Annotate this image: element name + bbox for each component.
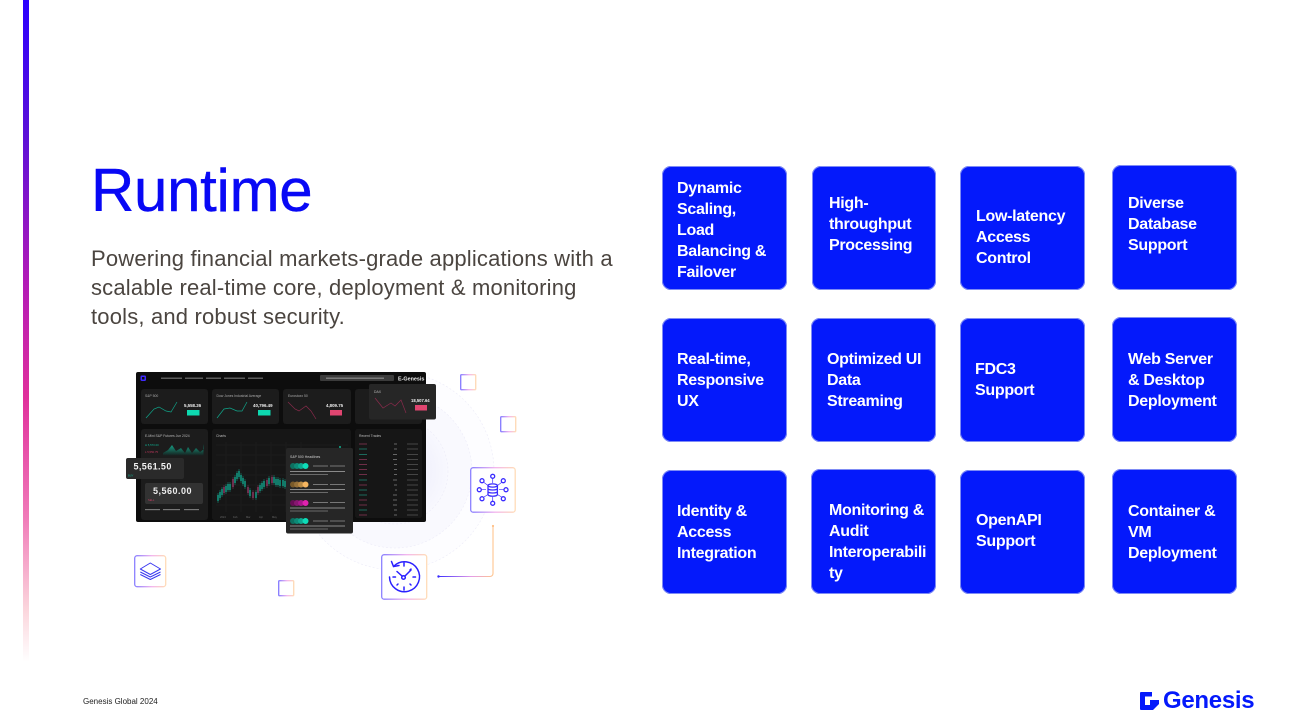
candles: falling xyxy=(224,475,272,500)
charts panel: Feb xyxy=(233,515,238,519)
feature card: Identity xyxy=(662,470,787,594)
recent trades panel xyxy=(355,429,422,518)
dashboard mockup xyxy=(126,372,436,534)
feature card: Container: Container & xyxy=(1128,503,1215,520)
price card: 5,561.50: 5,561.50 xyxy=(134,462,172,472)
feature card: FDC3: FDC3 xyxy=(975,361,1016,378)
feature card: Identity: Access xyxy=(677,524,731,541)
feature card: Diverse Database: Support xyxy=(1128,237,1187,254)
ticker card: Eurostoxx 50: 4,809.75 xyxy=(326,403,344,408)
feature card: Monitoring xyxy=(811,469,936,594)
headlines panel: S&P 500 Headlines xyxy=(290,455,321,459)
feature card: Low-latency xyxy=(960,166,1085,290)
feature card: Container xyxy=(1112,469,1237,594)
feature card: Web Server: & Desktop xyxy=(1128,372,1204,389)
feature card: Monitoring: Interoperabili xyxy=(829,544,926,561)
feature card: Container: VM xyxy=(1128,524,1151,541)
futures panel: H 5,570.00 xyxy=(145,443,159,447)
feature card: Web Server: Deployment xyxy=(1128,393,1217,410)
subtitle text: Powering financial markets-grade applications with a xyxy=(91,246,613,271)
charts panel: 2024 xyxy=(220,515,226,519)
feature card: FDC3: Support xyxy=(975,382,1034,399)
price card: 5,561.50: BUY xyxy=(128,474,134,478)
feature card: Monitoring: Audit xyxy=(829,523,868,540)
feature card: Real-time UX xyxy=(662,318,787,442)
DAX floating card xyxy=(369,384,436,420)
feature card: Monitoring: ty xyxy=(829,565,843,582)
accent bar xyxy=(23,0,29,662)
feature card: Optimized UI: Data xyxy=(827,372,860,389)
feature card: High-throughput: throughput xyxy=(829,216,911,233)
ticker card: S&P 500: S&P 500 xyxy=(145,394,158,398)
icon: clock xyxy=(382,555,427,599)
futures panel: 5,560.00 xyxy=(153,486,192,496)
charts panel xyxy=(212,429,351,520)
feature card: OpenAPI: OpenAPI xyxy=(976,512,1041,529)
DAX floating card: DAX xyxy=(374,390,382,394)
icon: database network xyxy=(471,468,515,512)
price card: 5,561.50 xyxy=(126,458,184,479)
ticker card: hidden xyxy=(355,389,422,424)
feature card: Diverse Database: Diverse xyxy=(1128,195,1184,212)
feature card: Container: Deployment xyxy=(1128,545,1217,562)
feature card: Dynamic Scaling: Balancing & xyxy=(677,243,766,260)
candles: rising xyxy=(218,469,285,503)
feature card: FDC3 xyxy=(960,318,1085,442)
ticker card: Dow Jones xyxy=(212,389,279,424)
headlines panel xyxy=(286,448,353,534)
DAX floating card: 18,507.64 xyxy=(411,398,430,403)
feature card: Low-latency: Control xyxy=(976,250,1031,267)
charts panel: May xyxy=(272,515,278,519)
feature card: Web Server xyxy=(1112,317,1237,442)
dashboard header: E-Genesis xyxy=(398,377,424,383)
feature card: Dynamic Scaling xyxy=(662,166,787,290)
feature card: Diverse Database xyxy=(1112,165,1237,290)
ticker card: S&P 500: 5,558.26 xyxy=(184,403,202,408)
feature card: Dynamic Scaling: Scaling, xyxy=(677,201,736,218)
subtitle text xyxy=(91,246,613,329)
feature card: Diverse Database: Database xyxy=(1128,216,1197,233)
icon: layers xyxy=(135,556,166,587)
ticker card: Eurostoxx 50 xyxy=(283,389,351,424)
feature card: OpenAPI xyxy=(960,470,1085,594)
subtitle text: scalable real-time core, deployment & monitoring xyxy=(91,275,577,300)
feature card: Real-time UX: Real-time, xyxy=(677,351,750,368)
connector arrow xyxy=(437,525,494,578)
charts panel: Charts xyxy=(216,434,226,438)
charts panel: Mar xyxy=(246,515,251,519)
feature card: Monitoring: Monitoring & xyxy=(829,502,924,519)
feature card: Identity: Integration xyxy=(677,545,756,562)
feature card: Real-time UX: Responsive xyxy=(677,372,764,389)
feature card: Dynamic Scaling: Load xyxy=(677,222,714,239)
ticker card: Dow Jones: 40,796.49 xyxy=(253,403,273,408)
feature card: Optimized UI xyxy=(811,318,936,442)
footer text: Genesis Global 2024 xyxy=(83,697,158,706)
ticker card: S&P 500 xyxy=(141,389,208,424)
feature card: High-throughput: High- xyxy=(829,195,868,212)
Genesis logo: Genesis xyxy=(1163,687,1254,714)
feature card: Web Server: Web Server xyxy=(1128,351,1213,368)
ticker card: Eurostoxx 50: Eurostoxx 50 xyxy=(288,394,308,398)
feature card: Low-latency: Low-latency xyxy=(976,208,1065,225)
ticker card: Dow Jones: Dow Jones Industrial Average xyxy=(216,394,261,398)
subtitle text: tools, and robust security. xyxy=(91,304,345,329)
feature card: Dynamic Scaling: Failover xyxy=(677,264,736,281)
title: Runtime xyxy=(91,157,312,224)
dashboard header xyxy=(140,375,424,383)
feature card: Optimized UI: Streaming xyxy=(827,393,903,410)
recent trades panel: Recent Trades xyxy=(359,434,381,438)
small gradient squares xyxy=(279,375,516,596)
feature card: Low-latency: Access xyxy=(976,229,1030,246)
concentric circles xyxy=(296,372,494,570)
futures panel: L 5,550.75 xyxy=(145,450,159,454)
charts panel: Apr xyxy=(259,515,263,519)
feature card: High-throughput: Processing xyxy=(829,237,912,254)
futures panel: E-Mini S&P Futures Jun 2024 xyxy=(145,434,190,438)
feature card: Real-time UX: UX xyxy=(677,393,699,410)
futures panel xyxy=(141,429,208,520)
feature card: Dynamic Scaling: Dynamic xyxy=(677,180,742,197)
feature card: Identity: Identity & xyxy=(677,503,747,520)
feature card: OpenAPI: Support xyxy=(976,533,1035,550)
feature card: High-throughput xyxy=(812,166,936,290)
futures panel: SELL xyxy=(148,498,155,502)
feature card: Optimized UI: Optimized UI xyxy=(827,351,921,368)
